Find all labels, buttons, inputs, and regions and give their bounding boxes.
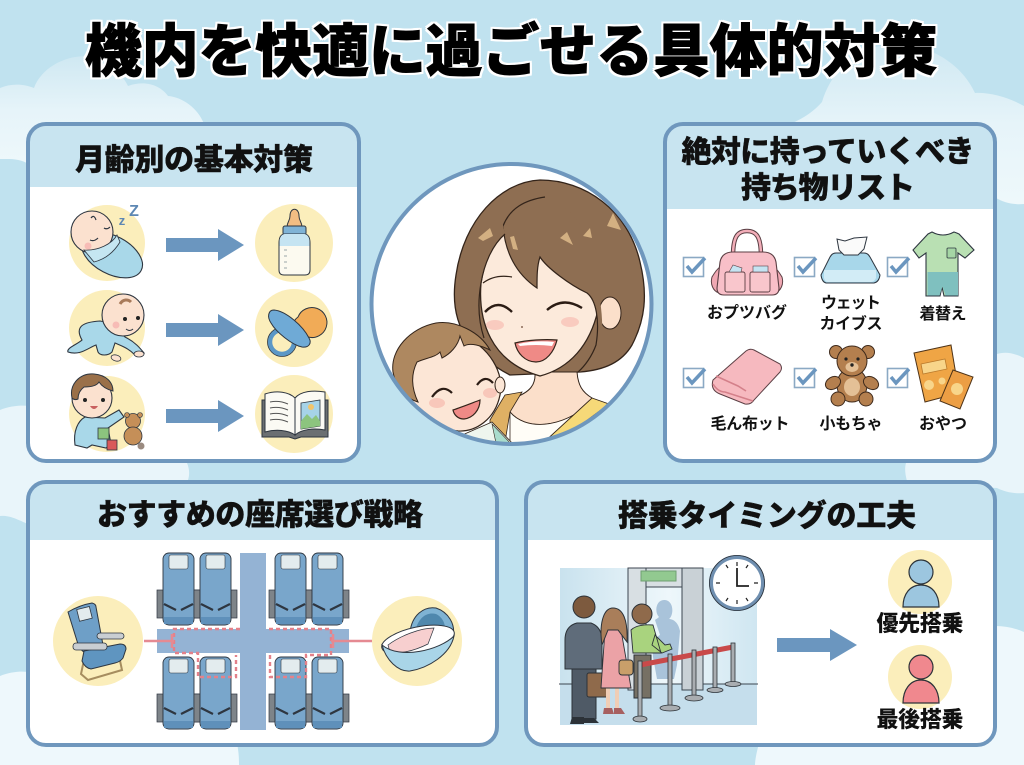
seat rows bbox=[157, 553, 349, 729]
dotted highlight: bulkhead right bbox=[268, 629, 331, 677]
cloud: upper right bbox=[790, 44, 1024, 204]
mother face bbox=[481, 233, 598, 376]
left fringe edge line bbox=[479, 234, 505, 338]
illustration: boarding queue at gate bbox=[559, 556, 764, 725]
icon: snack packets bbox=[914, 345, 973, 409]
icon: pacifier bbox=[255, 289, 333, 367]
baby blush bbox=[429, 388, 497, 408]
label: toy: 小もちゃ bbox=[820, 415, 882, 433]
bangs edge line bbox=[503, 197, 598, 372]
icon: picture book bbox=[255, 375, 333, 453]
title: 機内を快適に過ごせる具体的対策 bbox=[85, 20, 937, 84]
panel: must-have items bbox=[665, 124, 995, 461]
icon: last boarding person bbox=[888, 645, 952, 709]
mother top bbox=[510, 412, 572, 441]
panel: boarding timing bbox=[526, 482, 995, 745]
heading: seat selection strategy: おすすめの座席選び戦略 bbox=[97, 498, 423, 532]
checkbox: change of clothes bbox=[888, 258, 909, 276]
cloud: upper left bbox=[0, 56, 204, 165]
mother eyebrow bbox=[483, 276, 512, 283]
arrow: boarding choice bbox=[777, 629, 857, 661]
heading: must-have items bbox=[682, 136, 974, 205]
checkbox: wipes bbox=[794, 258, 816, 276]
heading: must-have items: 持ち物リスト bbox=[741, 172, 915, 205]
icon: bulkhead seat bbox=[53, 596, 143, 686]
panel: seat selection strategy bbox=[28, 482, 497, 745]
heading: must-have items: 絶対に持っていくべき bbox=[682, 136, 974, 169]
cloud: lower left bbox=[0, 672, 239, 765]
arrow: row 2 bbox=[166, 314, 244, 346]
label: blanket: 毛ん布ット bbox=[710, 414, 790, 433]
heading: age-based basics: 月齢別の基本対策 bbox=[75, 143, 313, 177]
aisle cross bbox=[157, 553, 349, 730]
icon: diaper bag bbox=[711, 231, 783, 295]
baby collar bbox=[492, 423, 510, 442]
man in suit bbox=[565, 596, 608, 724]
heading: boarding timing: 搭乗タイミングの工夫 bbox=[618, 499, 916, 533]
cardigan left bbox=[490, 392, 522, 442]
cardigan right bbox=[549, 398, 608, 437]
hair highlights bbox=[478, 213, 621, 250]
checkbox: toy bbox=[794, 368, 816, 388]
icon: wet wipes bbox=[821, 237, 880, 283]
mother mouth bbox=[515, 340, 557, 362]
icon: bassinet bbox=[372, 596, 462, 686]
security gate bbox=[628, 568, 703, 690]
ghost passenger bbox=[653, 600, 680, 679]
passenger in green bbox=[631, 604, 672, 698]
mother eyes bbox=[485, 302, 582, 312]
icon: sleeping swaddled newborn: Z bbox=[129, 203, 139, 220]
panel: age-based basics bbox=[28, 124, 359, 461]
icon: teddy bear bbox=[823, 346, 881, 406]
stanchions and rope bbox=[633, 643, 741, 722]
baby mouth bbox=[453, 400, 480, 419]
icon: sleeping swaddled newborn bbox=[69, 203, 150, 287]
mother ear bbox=[599, 297, 621, 329]
icon: sleeping swaddled newborn: z bbox=[119, 213, 126, 228]
label: wet wipes: カイブス bbox=[820, 314, 882, 333]
checkbox: snacks bbox=[888, 368, 909, 388]
mother bangs and side lock bbox=[504, 232, 602, 372]
baby eyes bbox=[432, 379, 493, 397]
connector: left bbox=[144, 634, 174, 648]
mother nose bbox=[521, 326, 523, 328]
icon: baby romper bbox=[913, 232, 974, 296]
icon: crawling baby bbox=[68, 290, 145, 366]
baby ear bbox=[495, 377, 505, 393]
dotted highlight: bulkhead left bbox=[174, 629, 240, 677]
label: snacks: おやつ bbox=[919, 415, 967, 433]
mother teeth bbox=[518, 341, 554, 346]
baby face bbox=[413, 338, 501, 432]
label: last boarding: 最後搭乗 bbox=[876, 707, 964, 732]
label: wet wipes bbox=[820, 294, 882, 333]
icon: priority boarding person bbox=[888, 550, 952, 614]
cloud: right middle bbox=[905, 353, 1024, 493]
arrow: row 3 bbox=[166, 400, 244, 432]
clock bbox=[710, 556, 764, 610]
baby hair bbox=[393, 323, 490, 402]
portrait: smiling mother and baby bbox=[372, 164, 652, 452]
cloud: left middle bbox=[0, 406, 189, 525]
mother left fringe bbox=[480, 224, 504, 285]
label: wet wipes: ウェット bbox=[821, 294, 881, 312]
woman in pink dress bbox=[601, 608, 633, 714]
mother hair back bbox=[454, 180, 644, 375]
mother neck and chest bbox=[510, 372, 592, 424]
label: change of clothes: 着替え bbox=[920, 304, 966, 323]
label: diaper bag: おプツバグ bbox=[707, 303, 787, 322]
baby clothes bbox=[464, 422, 512, 442]
cloud: lower right bbox=[755, 626, 1024, 765]
mother blush bbox=[486, 317, 579, 330]
icon: baby bottle bbox=[255, 204, 333, 282]
connector: right bbox=[331, 634, 372, 648]
checkbox: diaper bag bbox=[684, 258, 705, 276]
icon: infant playing with teddy and blocks bbox=[69, 374, 145, 452]
checkbox: blanket bbox=[684, 368, 705, 388]
label: priority boarding: 優先搭乗 bbox=[876, 611, 964, 636]
icon: folded blanket bbox=[712, 349, 782, 404]
arrow: row 1 bbox=[166, 229, 244, 261]
